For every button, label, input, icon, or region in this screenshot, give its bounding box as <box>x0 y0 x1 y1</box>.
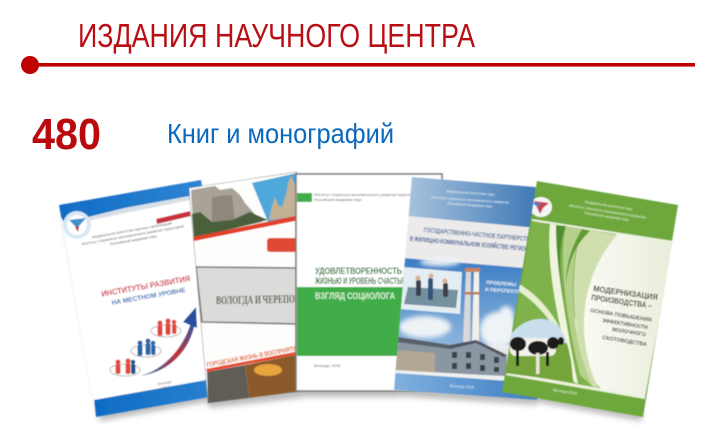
church photo <box>252 173 300 222</box>
book title <box>100 275 190 306</box>
label: books and monographs: Книг и монографий <box>167 118 394 149</box>
subtitle: ГОРОДСКАЯ ЖИЗНЬ В ВОСПРИЯТИИ <box>206 345 301 369</box>
book title: ГОСУДАРСТВЕННО-ЧАСТНОЕ ПАРТНЕРСТВО <box>423 227 534 243</box>
red tag <box>156 211 191 224</box>
city line: Вологда 2016 <box>553 388 577 396</box>
building photo <box>191 186 268 238</box>
prospects label: ПРОБЛЕМЫ <box>486 280 516 288</box>
book 4: public-private partnership <box>394 177 537 400</box>
publisher lines: Федеральное агентство научных организаций <box>92 221 172 239</box>
city line <box>158 380 172 390</box>
book 2: Vologda and Cherepovets <box>189 172 311 404</box>
orange strip <box>206 351 300 372</box>
book shadows <box>62 186 643 421</box>
publisher lines: Федеральное агентство наук <box>446 189 495 197</box>
institute lines: Российской академии наук <box>314 198 362 202</box>
city line: Вологда <box>158 380 172 386</box>
title: ИЗДАНИЯ НАУЧНОГО ЦЕНТРА <box>78 18 476 55</box>
team photo <box>400 267 462 314</box>
city line: Вологда 2016 <box>450 384 474 390</box>
title rule with dot <box>21 56 695 74</box>
book title <box>410 226 528 252</box>
panel background <box>507 220 672 397</box>
red button <box>267 238 301 252</box>
book subtitle: СКОТОВОДСТВА <box>602 335 647 348</box>
publisher lines: Институт социально-экономического развития территорий <box>81 224 184 246</box>
publisher lines: Федеральное агентство наук <box>584 200 633 211</box>
publisher lines <box>568 198 647 225</box>
gray title band <box>404 216 537 269</box>
book title: ЖИЗНЬЮ И УРОВЕНЬ СЧАСТЬЯ <box>314 276 405 286</box>
top blue band <box>55 178 206 223</box>
bottom blue band <box>93 380 208 418</box>
publisher lines <box>431 188 509 210</box>
green tag <box>297 193 312 202</box>
logo <box>530 197 552 217</box>
clouds <box>399 258 516 348</box>
book title <box>591 284 659 311</box>
bottom photos <box>207 365 250 404</box>
book 1: development institutions <box>58 179 208 418</box>
logo <box>63 211 91 239</box>
book subtitle <box>590 308 652 348</box>
book title: НА МЕСТНОМ УРОВНЕ <box>111 287 187 307</box>
white line above bottom band <box>506 372 645 399</box>
publisher lines: Российской академии наук <box>447 201 493 209</box>
factory building <box>395 336 508 380</box>
green ribbons <box>517 224 617 388</box>
book title: МОДЕРНИЗАЦИЯ <box>593 284 659 302</box>
book title: ПРОИЗВОДСТВА – <box>591 293 653 311</box>
cow photo <box>500 310 580 388</box>
gray title panel <box>196 267 300 324</box>
chimneys <box>463 268 480 342</box>
sky <box>396 258 537 345</box>
growth arrow with people <box>110 307 197 376</box>
book title: ВОЛОГДА И ЧЕРЕПОВЕЦ <box>216 293 311 307</box>
publisher lines: Институт социально-экономического развития <box>569 204 646 220</box>
white line under top band <box>532 219 673 243</box>
band title: ВЗГЛЯД СОЦИОЛОГА <box>315 291 396 301</box>
book subtitle: МОЛОЧНОГО <box>612 327 646 338</box>
book 5: modernization of production <box>500 181 678 417</box>
book title: УДОВЛЕТВОРЕННОСТЬ <box>315 266 402 276</box>
publisher lines: Российской академии наук <box>584 211 630 222</box>
book title <box>314 266 405 286</box>
city line: 2017 <box>161 385 170 391</box>
cream panel <box>575 234 673 397</box>
book title: ИНСТИТУТЫ РАЗВИТИЯ <box>101 274 191 299</box>
book title: В ЖИЛИЩНО-КОММУНАЛЬНОМ ХОЗЯЙСТВЕ РЕГИОНА <box>410 234 532 253</box>
bottom blue band <box>394 373 537 400</box>
institute lines: Институт социально-экономического развития территорий <box>314 193 418 197</box>
city line: Вологда, 2016 <box>314 363 341 368</box>
count: 480: 480 <box>32 110 101 159</box>
prospects label 2: И ПЕРСПЕКТИВЫ <box>485 287 529 296</box>
book subtitle: ЭФФЕКТИВНОСТИ <box>602 318 648 331</box>
book 3: life satisfaction <box>296 174 442 391</box>
book subtitle: ОСНОВА ПОВЫШЕНИЯ <box>590 308 652 324</box>
publisher lines: Институт социально-экономического развития <box>431 195 509 205</box>
publisher lines: Российской академии наук <box>110 234 158 246</box>
red strip <box>193 215 300 241</box>
green band <box>296 286 404 357</box>
institute lines <box>314 193 418 202</box>
top gradient band <box>406 177 537 228</box>
